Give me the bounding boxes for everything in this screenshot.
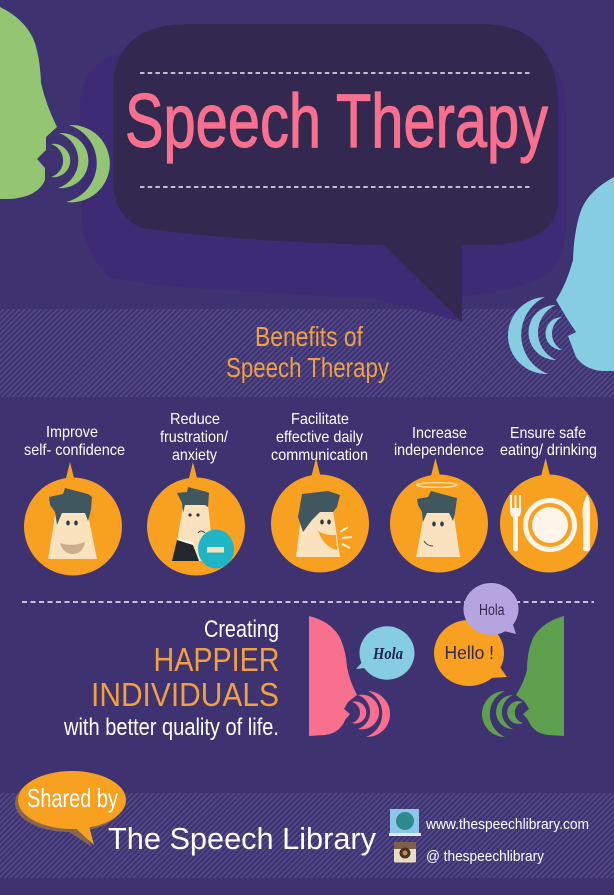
bubble: blue hola: Hola [372, 644, 403, 663]
text: creating happier individuals [63, 616, 280, 741]
benefit: reduce frustration and anxiety: anxiety [172, 447, 217, 464]
heading: benefits: Benefits of [255, 321, 363, 352]
text: creating happier individuals: with better quality of life. [63, 714, 279, 741]
benefit: facilitate effective daily communication: effective daily [276, 429, 363, 446]
bubble: purple hola [464, 583, 518, 635]
benefit: increase independence: Increase [412, 425, 467, 442]
hatched band: benefits heading [0, 309, 614, 397]
bubble: orange hello: Hello ! [444, 643, 494, 663]
pink speaking head [309, 616, 390, 737]
organisation name: The Speech Library [108, 821, 376, 856]
green speaking head [0, 7, 110, 202]
dashed divider [22, 601, 594, 603]
title dashed line top [140, 72, 530, 74]
back speech bubble [80, 50, 566, 322]
benefit: reduce frustration and anxiety [147, 411, 245, 576]
benefit: increase independence: independence [394, 442, 484, 459]
bubble: orange hello [434, 620, 507, 686]
benefit: facilitate effective daily communication [271, 411, 369, 572]
title speech bubble [113, 24, 558, 322]
title dashed line bottom [140, 186, 530, 188]
icon: instagram [394, 842, 416, 862]
text: creating happier individuals: INDIVIDUALS [91, 676, 279, 713]
bubble: purple hola: Hola [479, 602, 505, 619]
benefit: improve self-confidence: self- confidence [24, 442, 125, 459]
benefit: reduce frustration and anxiety: frustration/ [160, 429, 228, 446]
green speaking head, right [482, 616, 564, 737]
heading: benefits: Speech Therapy [226, 352, 389, 383]
benefit: ensure safe eating and drinking: eating/ drinking [500, 442, 597, 459]
heading: benefits [226, 321, 389, 383]
website: www.thespeechlibrary.com [425, 816, 589, 833]
benefit: increase independence [390, 425, 488, 572]
benefit: facilitate effective daily communication: Facilitate [291, 411, 349, 428]
benefit: reduce frustration and anxiety: Reduce [170, 411, 220, 428]
bubble: blue hola [356, 626, 414, 680]
benefit: improve self-confidence: Improve [46, 424, 98, 441]
benefit: facilitate effective daily communication: communication [271, 447, 368, 464]
benefit: improve self-confidence [24, 424, 125, 576]
hatched band: footer [0, 793, 614, 878]
text: creating happier individuals: Creating [204, 616, 279, 643]
icon: website monitor [389, 809, 421, 836]
social handle: @ thespeechlibrary [426, 848, 544, 865]
shared by badge [15, 771, 126, 847]
blue speaking head [508, 177, 614, 374]
text: creating happier individuals: HAPPIER [154, 641, 280, 678]
shared by badge: Shared by [27, 783, 118, 813]
benefit: ensure safe eating and drinking: Ensure safe [510, 425, 586, 442]
benefit: ensure safe eating and drinking [500, 425, 598, 572]
